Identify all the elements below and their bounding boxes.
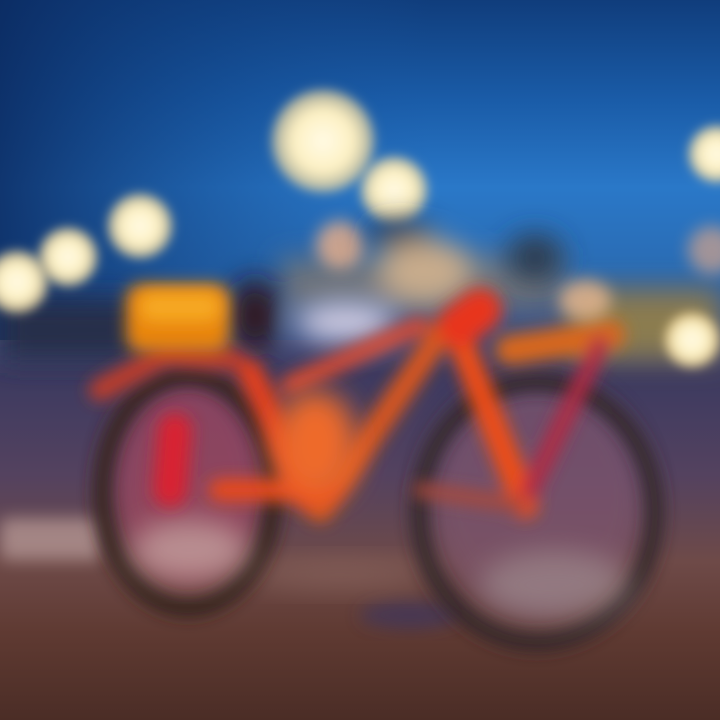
chainring area [273, 390, 357, 500]
light: edge left globe [0, 248, 51, 316]
frame [100, 310, 610, 510]
light: large globe [268, 86, 378, 196]
pavement details [0, 518, 460, 629]
light: dim right glow [688, 226, 720, 274]
front wheel [419, 380, 655, 642]
street lights [0, 86, 720, 370]
bag highlight [140, 292, 220, 322]
front rack highlight [559, 280, 611, 320]
light: second globe [358, 154, 430, 226]
bicycle [100, 222, 655, 642]
rear wheel [102, 375, 274, 608]
skyline: distant dark horizon [0, 258, 720, 360]
light: low right globe [662, 310, 720, 370]
light: left globe [105, 191, 175, 261]
light: dim centre glow [316, 221, 364, 269]
light: right edge globe [686, 123, 720, 185]
handlebar and dark top parts [231, 222, 563, 351]
light: far left globe [36, 225, 100, 289]
rear bag [126, 284, 230, 352]
